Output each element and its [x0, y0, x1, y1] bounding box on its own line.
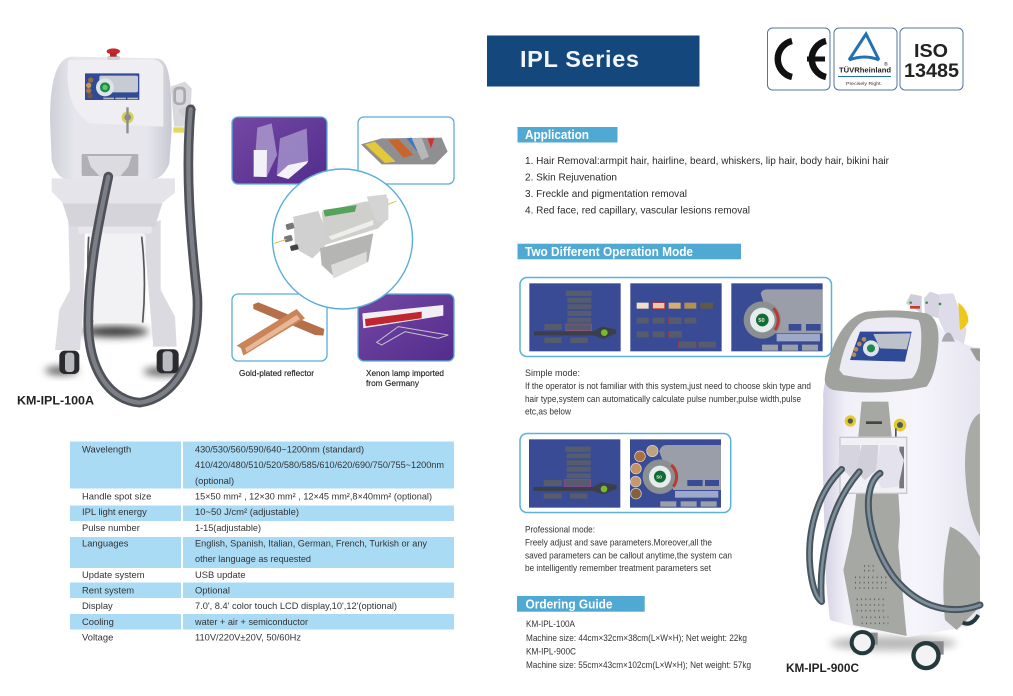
parameter names: Rent system [82, 584, 134, 596]
parameter values: 110V/220V±20V, 50/60Hz [195, 632, 301, 642]
parameter names [82, 444, 151, 642]
professional mode description: saved parameters can be callout anytime,the system can [525, 550, 732, 560]
ordering details: KM-IPL-100A [526, 619, 576, 629]
panel: xenon lamp [358, 294, 454, 361]
machine photo: KM-IPL-900C [809, 292, 980, 670]
heading: Ordering Guide [517, 596, 645, 612]
parameter values: English, Spanish, Italian, German, French, Turkish or any [195, 538, 427, 548]
control screen [85, 73, 139, 100]
panel: simple mode screens [520, 278, 832, 356]
badge: TUV Rheinland: Precisely Right. [846, 81, 882, 87]
panel: professional mode screens [520, 434, 731, 512]
application list [525, 156, 890, 216]
badge: CE [768, 28, 830, 90]
screen: treatment dial: 50 [758, 318, 765, 324]
caption: xenon lamp [366, 368, 444, 388]
heading: Application [518, 127, 618, 142]
simple mode description [525, 368, 811, 416]
parameter values: (optional) [195, 475, 234, 486]
parameter values: 7.0', 8.4' color touch LCD display,10',12'(optional) [195, 600, 397, 611]
section: ordering guide [517, 596, 751, 670]
professional mode description: Freely adjust and save parameters.Moreover,all the [525, 538, 712, 548]
certification badges [768, 28, 963, 90]
model label: KM-IPL-100A: KM-IPL-100A [17, 394, 94, 408]
application list: 4. Red face, red capillary, vascular lesions removal [525, 206, 750, 216]
simple mode description: Simple mode: [525, 368, 580, 378]
caption: xenon lamp: Xenon lamp imported [366, 368, 444, 378]
application list: 1. Hair Removal:armpit hair, hairline, beard, whiskers, lip hair, body hair, bikini hair [525, 156, 890, 167]
panel: gold-plated reflector [232, 294, 327, 361]
badge: ISO 13485 [900, 28, 963, 90]
screen: treatment dial with skin portraits [630, 439, 721, 508]
row bands [70, 442, 454, 630]
badge: ISO 13485: ISO [914, 41, 948, 61]
wheels [850, 615, 978, 670]
parameter values: Optional [195, 584, 230, 596]
parameter names: Display [82, 600, 113, 611]
cables [809, 469, 980, 610]
machine body [823, 323, 980, 637]
parameter values: USB update [195, 569, 246, 580]
key switch [122, 107, 134, 133]
simple mode description: hair type,system can automatically calculate pulse number,pulse width,pulse [525, 394, 801, 404]
badge: ISO 13485: 13485 [904, 61, 959, 82]
parameter names: Pulse number [82, 522, 140, 533]
parameter names: IPL light energy [82, 506, 147, 517]
centre grey strip [843, 402, 907, 636]
parameter values: 1-15(adjustable) [195, 522, 261, 533]
ordering details: Machine size: 44cm×32cm×38cm(L×W×H); Net weight: 22kg [526, 633, 747, 643]
screen: menu [529, 439, 620, 508]
parameter values: 10~50 J/cm² (adjustable) [195, 506, 299, 517]
parameter names: Cooling [82, 616, 114, 627]
specification table [70, 442, 454, 642]
application list: 3. Freckle and pigmentation removal [525, 189, 687, 200]
badge: TUV Rheinland: ® [884, 61, 888, 68]
heading: Application: Application [525, 128, 589, 142]
professional mode description: be intelligently remember treatment parameters set [525, 563, 711, 573]
cables [88, 109, 197, 403]
parameter names: Handle spot size [82, 490, 151, 502]
ordering details: Machine size: 55cm×43cm×102cm(L×W×H); Net weight: 57kg [526, 660, 751, 670]
title banner: IPL Series [520, 46, 639, 72]
heading: Ordering Guide: Ordering Guide [526, 597, 613, 611]
parameter values: 15×50 mm² , 12×30 mm² , 12×45 mm²,8×40mm² (optional) [195, 490, 432, 502]
caption: reflector: Gold-plated reflector [239, 368, 314, 378]
parameter names: Languages [82, 538, 129, 548]
professional mode description: Professional mode: [525, 525, 595, 535]
parameter names: Wavelength [82, 444, 131, 454]
simple mode description: If the operator is not familiar with this system,just need to choose skin type and [525, 381, 811, 391]
badge: TUV Rheinland [834, 28, 897, 90]
parameter values: water + air + semiconductor [194, 616, 308, 627]
panel: coated filters [358, 117, 454, 184]
parameter values: 430/530/560/590/640~1200nm (standard) [195, 444, 364, 454]
vent grille [855, 566, 888, 623]
side handpiece [171, 82, 197, 133]
section: application [518, 127, 890, 216]
ordering details: KM-IPL-900C [526, 646, 576, 656]
parameter names: Voltage [82, 632, 113, 642]
screen: treatment dial [731, 283, 823, 351]
parameter values [194, 444, 444, 642]
parameter values: 410/420/480/510/520/580/585/610/620/690/750/755~1200nm [195, 459, 444, 470]
title banner [487, 36, 700, 86]
caption: xenon lamp: from Germany [366, 378, 420, 388]
screen: treatment dial with skin portraits: 50 [656, 474, 662, 480]
section: operation modes [518, 244, 832, 573]
parameter values: other language as requested [195, 553, 311, 564]
panel: handpiece circle [272, 169, 412, 309]
handpiece rack [838, 437, 907, 493]
model label: KM-IPL-900C: KM-IPL-900C [786, 661, 859, 675]
machine photo: KM-IPL-100A [45, 48, 197, 403]
component photo group [232, 117, 454, 388]
rear handpieces [906, 292, 968, 347]
card slot [866, 421, 882, 424]
screen: menu [529, 283, 621, 351]
top console [825, 310, 939, 393]
yellow sockets [845, 415, 906, 448]
panel: crystal light guides [232, 117, 327, 184]
professional mode description [525, 525, 732, 573]
ordering details [526, 619, 751, 670]
screen: skin type selection [630, 283, 722, 351]
parameter names: Update system [82, 569, 145, 580]
heading: Two Different Operation Mode: Two Different Operation Mode [525, 245, 693, 259]
wheels [59, 349, 179, 374]
badge: TUV Rheinland: TÜVRheinland [839, 66, 891, 74]
simple mode description: etc,as below [525, 406, 571, 416]
e-stop button [107, 48, 120, 60]
application list: 2. Skin Rejuvenation [525, 172, 617, 184]
